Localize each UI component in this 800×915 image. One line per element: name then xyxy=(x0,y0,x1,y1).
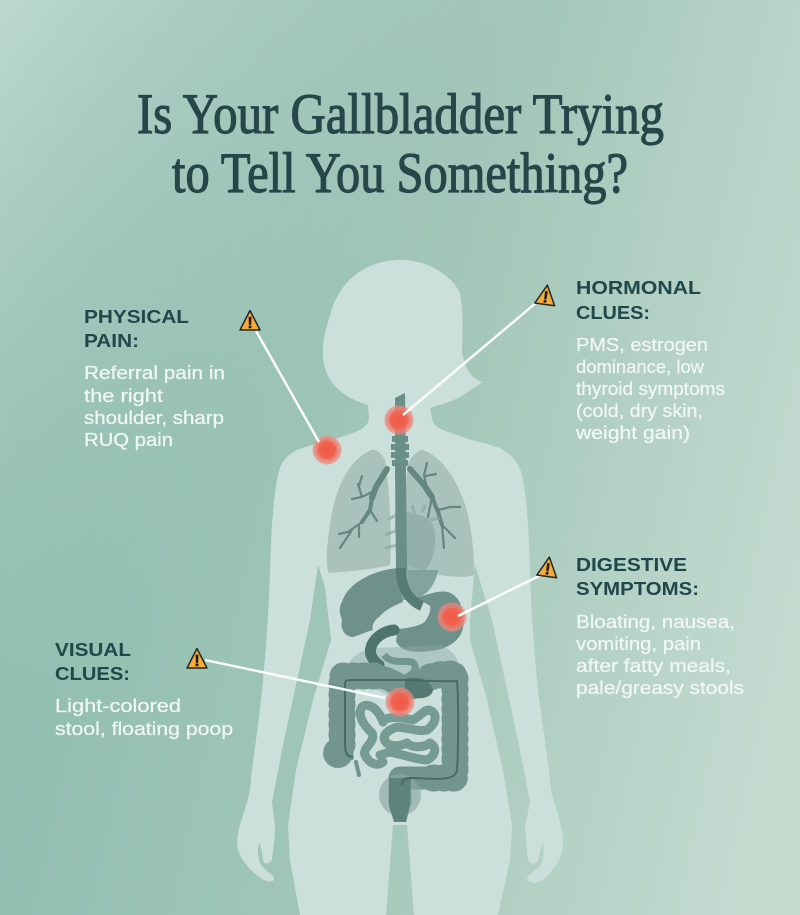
text block: visual clues: stool, floating poop xyxy=(55,719,233,739)
text block: physical pain: Referral pain in xyxy=(84,363,225,383)
bladder xyxy=(379,774,421,816)
text block: physical pain: shoulder, sharp xyxy=(84,408,224,428)
rectum xyxy=(389,778,411,822)
text block: physical pain: the right xyxy=(84,386,163,406)
text block: physical pain xyxy=(84,307,225,450)
diaphragm piece xyxy=(398,570,438,600)
text block: hormonal clues xyxy=(575,278,725,443)
text block: digestive symptoms: pale/greasy stools xyxy=(576,678,744,698)
title: to Tell You Something? xyxy=(172,142,628,205)
text block: hormonal clues: dominance, low xyxy=(576,357,705,377)
icon: warning physical xyxy=(240,310,260,332)
arrow line: digestive symptoms xyxy=(458,575,541,616)
text block: physical pain: PAIN: xyxy=(84,331,139,351)
arrow line: hormonal clues xyxy=(403,302,537,415)
lungs xyxy=(327,450,474,577)
text block: visual clues: VISUAL xyxy=(55,640,131,660)
text block: digestive symptoms: Bloating, nausea, xyxy=(576,612,735,632)
text block: physical pain: RUQ pain xyxy=(84,430,173,450)
colon xyxy=(342,674,455,805)
text block: hormonal clues: (cold, dry skin, xyxy=(576,401,703,421)
arrow line: physical pain xyxy=(256,331,319,442)
stomach xyxy=(396,591,463,652)
text block: digestive symptoms: DIGESTIVE xyxy=(576,555,687,575)
duodenum xyxy=(370,630,394,665)
text block: physical pain: PHYSICAL xyxy=(84,307,189,327)
liver xyxy=(340,568,403,637)
title: Is Your Gallbladder Trying xyxy=(137,83,664,146)
link intestine xyxy=(384,655,415,678)
arrow line: visual clues xyxy=(205,660,385,698)
icon: warning hormonal xyxy=(534,284,557,308)
icon: warning visual xyxy=(187,648,207,670)
body silhouette xyxy=(237,260,563,915)
pain point: shoulder xyxy=(312,435,342,465)
text block: digestive symptoms: SYMPTOMS: xyxy=(576,579,699,599)
trachea and esophagus xyxy=(391,393,409,570)
icon: warning digestive xyxy=(536,556,559,580)
pain point: throat xyxy=(384,405,414,435)
text block: visual clues: CLUES: xyxy=(55,664,130,684)
text block: visual clues xyxy=(55,640,233,739)
text block: digestive symptoms xyxy=(576,555,744,698)
icon: warning visual: ! xyxy=(194,653,200,670)
bronchi xyxy=(339,463,460,548)
colon center line xyxy=(345,680,458,785)
text block: hormonal clues: PMS, estrogen xyxy=(576,335,708,355)
esophagus to stomach xyxy=(401,568,422,606)
title xyxy=(137,83,664,205)
pain point: stomach xyxy=(437,602,467,632)
appendix xyxy=(356,762,359,775)
text block: digestive symptoms: after fatty meals, xyxy=(576,656,731,676)
text block: digestive symptoms: vomiting, pain xyxy=(576,634,701,654)
text block: hormonal clues: CLUES: xyxy=(576,303,650,323)
organs xyxy=(323,393,474,822)
text block: hormonal clues: HORMONAL xyxy=(576,278,701,298)
text block: hormonal clues: thyroid symptoms xyxy=(576,379,725,399)
colon overlap xyxy=(405,678,433,698)
icon: warning hormonal: ! xyxy=(542,289,549,307)
text block: hormonal clues: weight gain) xyxy=(575,423,690,443)
cecum xyxy=(323,738,353,768)
icon: warning physical: ! xyxy=(247,315,253,332)
icon: warning digestive: ! xyxy=(544,561,551,579)
text block: visual clues: Light-colored xyxy=(55,696,181,716)
pain point: intestine xyxy=(385,687,415,717)
pale abdominal dome xyxy=(345,645,462,700)
small intestine xyxy=(360,705,435,764)
heart xyxy=(385,505,440,575)
